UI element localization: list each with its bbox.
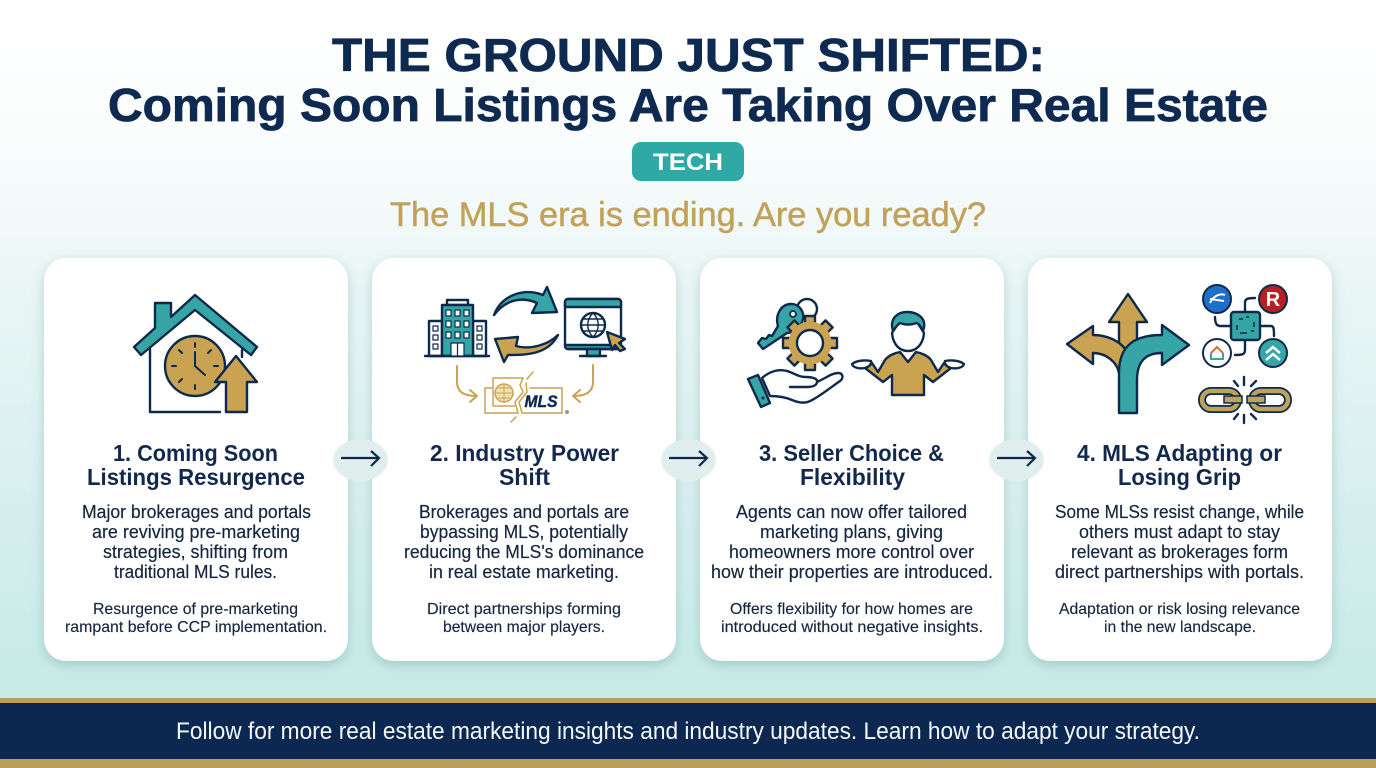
body text: homeowners more control over	[729, 541, 974, 562]
heading: Losing Grip	[1118, 464, 1241, 490]
heading: Shift	[499, 464, 550, 490]
footer banner: Follow for more real estate marketing insights and industry updates. Learn how to adapt your strategy.	[176, 718, 1200, 745]
heading	[1077, 440, 1282, 490]
supporting note	[65, 601, 327, 636]
supporting note	[1059, 601, 1300, 636]
body text: Some MLSs resist change, while	[1055, 501, 1304, 522]
supporting note	[427, 601, 621, 636]
body text: reducing the MLS's dominance	[404, 541, 644, 562]
heading	[87, 440, 305, 490]
supporting note: between major players.	[443, 619, 605, 636]
heading	[759, 440, 944, 490]
heading: 1. Coming Soon	[113, 440, 278, 466]
heading: Listings Resurgence	[87, 464, 305, 490]
body text: Agents can now offer tailored	[736, 501, 967, 522]
supporting note: Resurgence of pre-marketing	[93, 601, 298, 618]
subtitle: The MLS era is ending. Are you ready?	[390, 196, 986, 234]
tech badge	[632, 142, 744, 181]
heading: Flexibility	[800, 464, 905, 490]
title: Coming Soon Listings Are Taking Over Real Estate	[108, 79, 1268, 131]
title	[108, 29, 1268, 131]
body text: relevant as brokerages form	[1071, 541, 1288, 562]
arrow: card 1 to 2	[333, 439, 388, 481]
icon: key, gear and open hand	[748, 299, 842, 407]
body text	[404, 501, 644, 582]
panel: seller choice and flexibility	[700, 258, 1004, 661]
icon: exchange arrows	[494, 287, 558, 362]
body text: strategies, shifting from	[103, 541, 288, 562]
panel: coming soon listings resurgence	[44, 258, 348, 661]
body text: direct partnerships with portals.	[1055, 561, 1304, 582]
body text: others must adapt to stay	[1079, 521, 1281, 542]
arrow: card 3 to 4	[989, 439, 1044, 481]
title: THE GROUND JUST SHIFTED:	[332, 29, 1045, 81]
icon: portal network	[1203, 285, 1287, 367]
supporting note: in the new landscape.	[1104, 619, 1256, 636]
icon: house with clock and up arrow	[134, 295, 257, 412]
heading: 2. Industry Power	[430, 440, 619, 466]
supporting note: Direct partnerships forming	[427, 601, 621, 618]
icon: broken MLS card with arrows	[457, 365, 593, 422]
body text: are reviving pre-marketing	[92, 521, 300, 542]
body text	[82, 501, 311, 582]
heading	[430, 440, 619, 490]
icon: portal network: R	[1266, 289, 1281, 311]
supporting note: rampant before CCP implementation.	[65, 619, 327, 636]
body text: Brokerages and portals are	[419, 501, 629, 522]
icon: forked arrows	[1067, 294, 1189, 413]
body text: Major brokerages and portals	[82, 501, 311, 522]
tech badge: TECH	[653, 149, 723, 176]
icon: browser window with cursor	[565, 299, 625, 356]
icon: broken MLS card with arrows: MLS	[524, 393, 558, 411]
icon: building	[425, 300, 489, 356]
heading: 4. MLS Adapting or	[1077, 440, 1282, 466]
body text: traditional MLS rules.	[114, 561, 277, 582]
body text: bypassing MLS, potentially	[420, 521, 629, 542]
arrow: card 2 to 3	[661, 439, 716, 481]
heading: 3. Seller Choice &	[759, 440, 944, 466]
supporting note: Offers flexibility for how homes are	[730, 601, 973, 618]
panel: MLS adapting or losing grip	[1028, 258, 1332, 661]
body text	[711, 501, 993, 582]
supporting note: introduced without negative insights.	[721, 619, 983, 636]
body text: how their properties are introduced.	[711, 561, 993, 582]
supporting note: Adaptation or risk losing relevance	[1059, 601, 1300, 618]
icon: shrugging person	[852, 312, 964, 395]
body text: in real estate marketing.	[429, 561, 619, 582]
body text	[1055, 501, 1304, 582]
panel: industry power shift	[372, 258, 676, 661]
body text: marketing plans, giving	[760, 521, 943, 542]
supporting note	[721, 601, 983, 636]
icon: broken chain	[1202, 377, 1288, 423]
footer banner	[0, 698, 1376, 768]
